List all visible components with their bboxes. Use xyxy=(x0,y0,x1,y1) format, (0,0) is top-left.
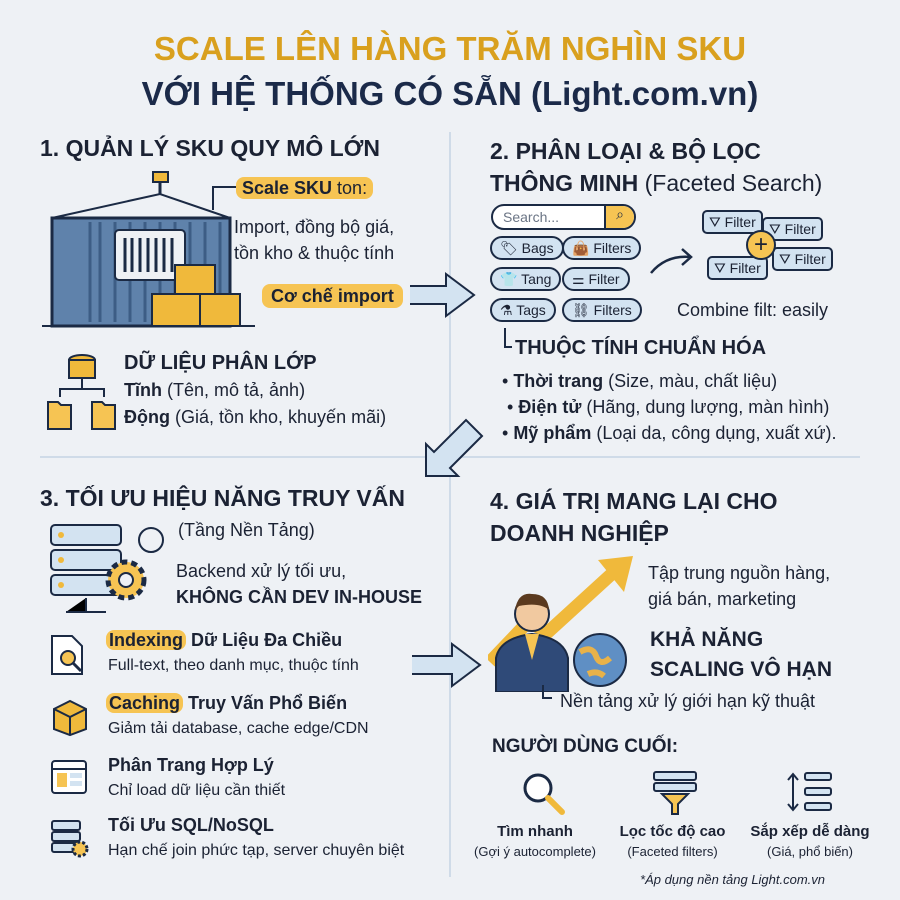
panel: 4 business value xyxy=(474,488,870,859)
chips: ⛓ Filters xyxy=(572,302,632,318)
heading 4: DOANH NGHIỆP xyxy=(490,520,669,546)
panel: 3 query performance xyxy=(40,485,422,859)
panel: 2 faceted search xyxy=(490,138,837,443)
icon: combined filters: ⛛ Filter xyxy=(779,251,826,267)
text: import xyxy=(234,217,394,263)
text: du lieu phan lop: Tĩnh (Tên, mô tả, ảnh) xyxy=(124,380,305,400)
heading 3: 3. TỐI ƯU HIỆU NĂNG TRUY VẤN xyxy=(40,485,405,511)
search box: Search... xyxy=(503,209,559,225)
heading 4: 4. GIÁ TRỊ MANG LẠI CHO xyxy=(490,488,778,514)
heading: nguoi dung cuoi: NGƯỜI DÙNG CUỐI: xyxy=(492,736,678,757)
chips: 🏷 Bags xyxy=(500,240,554,256)
text: du lieu phan lop xyxy=(124,350,386,427)
list: • Mỹ phẩm (Loại da, công dụng, xuất xứ). xyxy=(502,423,837,443)
chips xyxy=(490,236,642,322)
icon: funnel xyxy=(653,771,697,815)
arrow: diagonal down-left xyxy=(425,418,484,477)
arrow: to section 4 xyxy=(412,642,482,688)
text: backend: KHÔNG CẦN DEV IN-HOUSE xyxy=(176,587,422,607)
connector xyxy=(504,328,512,348)
list: • Điện tử (Hãng, dung lượng, màn hình) xyxy=(507,397,829,417)
text: kha nang scaling: SCALING VÔ HẠN xyxy=(650,658,832,681)
item: pagination: Phân Trang Hợp Lý xyxy=(108,755,274,775)
icon: container xyxy=(42,171,255,328)
text: tap trung: giá bán, marketing xyxy=(648,589,796,609)
chips: 👜 Filters xyxy=(572,240,631,256)
text: kha nang scaling: KHẢ NĂNG xyxy=(650,628,763,651)
panel: 4 business value: Sắp xếp dễ dàng xyxy=(750,823,870,840)
search box: ⌕ xyxy=(616,206,624,222)
chips: ⚌ Filter xyxy=(572,271,620,287)
heading 2: 2. PHÂN LOẠI & BỘ LỌC xyxy=(490,138,761,164)
text: du lieu phan lop: DỮ LIỆU PHÂN LỚP xyxy=(124,352,317,374)
panel: 4 business value: (Faceted filters) xyxy=(627,844,718,859)
text: kha nang scaling xyxy=(650,626,832,681)
panel: 4 business value: (Giá, phổ biến) xyxy=(767,844,853,859)
icon: combined filters: ⛛ Filter xyxy=(769,221,816,237)
item: pagination: Chỉ load dữ liệu cần thiết xyxy=(108,782,285,799)
text: combine: Combine filt: easily xyxy=(677,300,828,320)
connector xyxy=(542,685,552,699)
icon: sort xyxy=(787,772,832,812)
icon: search xyxy=(524,774,565,815)
connector xyxy=(212,186,236,210)
text: import: Import, đồng bộ giá, xyxy=(234,217,394,237)
heading 2: THÔNG MINH (Faceted Search) xyxy=(490,170,822,196)
text: tap trung xyxy=(648,563,830,609)
icon: server gear xyxy=(50,524,164,613)
labels: end user: Tìm nhanh xyxy=(497,823,573,840)
callout: scale sku: Scale SKU ton: xyxy=(242,178,367,198)
icon: combined filters xyxy=(702,210,833,280)
chips: 👕 Tang xyxy=(500,271,551,287)
text: import: tồn kho & thuộc tính xyxy=(234,243,394,263)
icon: data hierarchy xyxy=(47,354,116,430)
item: sql xyxy=(51,815,404,859)
panel: 1 sku management xyxy=(40,135,403,430)
text: backend xyxy=(176,561,422,607)
text: backend: Backend xử lý tối ưu, xyxy=(176,561,346,581)
item: sql: Hạn chế join phức tạp, server chuyên biệt xyxy=(108,842,404,859)
callout: co che import: Cơ chế import xyxy=(271,286,394,306)
search box xyxy=(491,204,636,230)
arrow: to section 2 xyxy=(410,272,476,318)
list xyxy=(502,371,837,443)
item: caching: Caching Truy Vấn Phổ Biến xyxy=(109,693,347,713)
text: tap trung: Tập trung nguồn hàng, xyxy=(648,563,830,583)
panel: 4 business value: Lọc tốc độ cao xyxy=(620,823,725,840)
item: indexing: Full-text, theo danh mục, thuộc tính xyxy=(108,657,359,674)
title: SCALE LÊN HÀNG TRĂM NGHÌN SKU xyxy=(154,30,746,67)
title: VỚI HỆ THỐNG CÓ SẴN (Light.com.vn) xyxy=(142,75,758,112)
heading 4 xyxy=(490,488,778,546)
title xyxy=(142,30,758,112)
icon: combined filters: ⛛ Filter xyxy=(709,214,756,230)
item: indexing: Indexing Dữ Liệu Đa Chiều xyxy=(109,630,342,650)
item: sql: Tối Ưu SQL/NoSQL xyxy=(108,815,274,835)
item: indexing xyxy=(51,630,359,675)
dividers xyxy=(449,132,451,877)
text: thuoc tinh: THUỘC TÍNH CHUẨN HÓA xyxy=(515,337,766,359)
text: du lieu phan lop: Động (Giá, tồn kho, khuyến mãi) xyxy=(124,407,386,427)
icon: combined filters: ⛛ Filter xyxy=(714,260,761,276)
item: caching: Giảm tải database, cache edge/CDN xyxy=(108,720,369,737)
list: • Thời trang (Size, màu, chất liệu) xyxy=(502,371,777,391)
labels: end user xyxy=(474,823,596,859)
item: caching xyxy=(53,693,369,737)
chips: ⚗ Tags xyxy=(500,302,546,318)
heading 1: 1. QUẢN LÝ SKU QUY MÔ LỚN xyxy=(40,135,380,161)
footnote: *Áp dụng nền tảng Light.com.vn xyxy=(640,872,825,887)
panel: 3 query performance: (Tầng Nền Tảng) xyxy=(178,520,315,540)
heading 2 xyxy=(490,138,822,196)
icon: businessman growth globe xyxy=(488,556,633,692)
arrow: curved xyxy=(650,248,693,274)
labels: end user: (Gợi ý autocomplete) xyxy=(474,844,596,859)
icon: combined filters: + xyxy=(754,231,768,258)
item: pagination xyxy=(51,755,285,799)
text: nen tang: Nền tảng xử lý giới hạn kỹ thuật xyxy=(560,691,815,711)
